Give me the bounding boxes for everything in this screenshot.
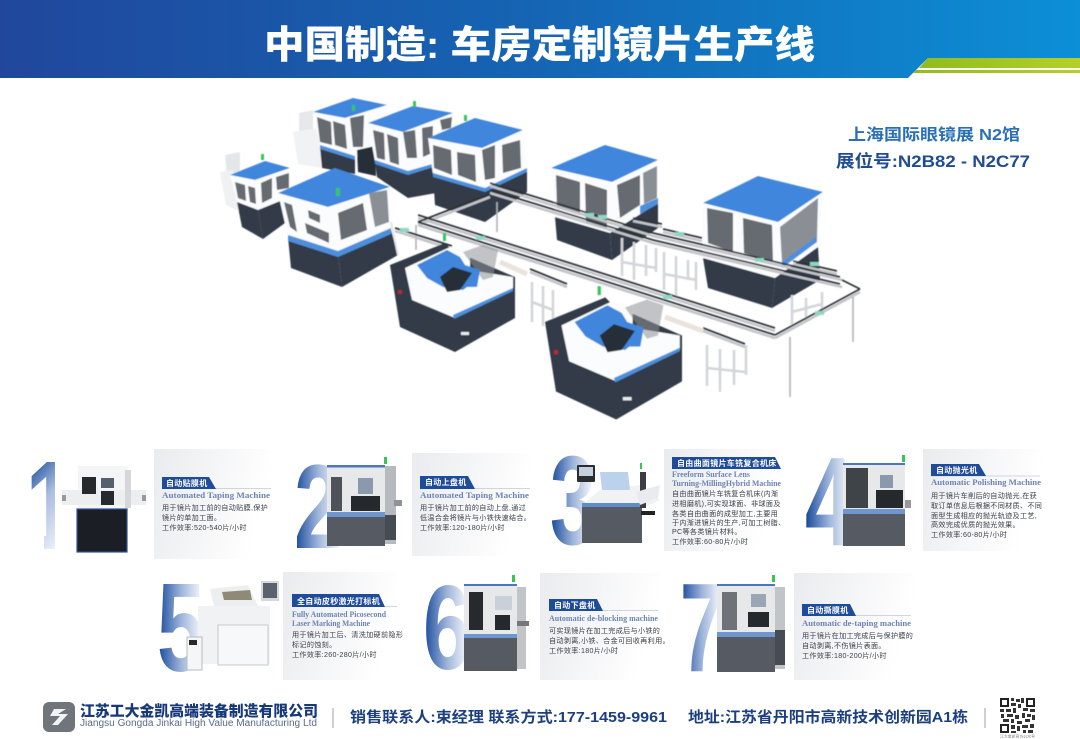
label 4 xyxy=(931,464,1042,539)
step 4 xyxy=(805,431,1042,572)
step 7 xyxy=(680,557,915,698)
panel 5 xyxy=(283,572,399,680)
machine 1 xyxy=(62,466,146,552)
label 5: Fully Automated Picosecond xyxy=(292,610,386,619)
machine: centre xyxy=(551,145,658,260)
label 3: PC等各类镜片材料。 xyxy=(672,527,742,536)
label 3: 工作效率:60-80片/小时 xyxy=(672,537,748,546)
panel 6 xyxy=(540,573,660,680)
numeral 6: 6 xyxy=(423,561,471,695)
label 7: 工作效率:180-200片/小时 xyxy=(802,651,887,660)
label 3: 于内渐进镜片的生产,可加工树脂、 xyxy=(672,518,786,527)
numeral 3: 3 xyxy=(550,430,596,571)
label 4: Automatic Polishing Machine xyxy=(931,478,1041,487)
company name: 江苏工大金凯高端装备制造有限公司 xyxy=(80,702,318,720)
sales contact: 销售联系人:束经理 联系方式:177-1459-9961 xyxy=(350,708,667,726)
label 2: Automated Taping Machine xyxy=(420,491,529,500)
label 1: 用于镜片加工前的自动贴膜,保护 xyxy=(162,503,268,512)
label 5: 标记的蚀刻。 xyxy=(292,640,336,649)
label 2 xyxy=(420,476,531,532)
company name: Jiangsu Gongda Jinkai High Value Manufacturing Ltd xyxy=(80,718,317,729)
label 3: 进相磨机),可实现球面、非球面及 xyxy=(672,499,781,508)
QR code xyxy=(1000,698,1035,733)
step 1 xyxy=(32,449,271,559)
exhibition hall: 上海国际眼镜展 N2馆 xyxy=(848,125,1020,144)
label 7 xyxy=(802,604,913,660)
panel 4 xyxy=(923,449,1041,551)
panel 7 xyxy=(794,573,915,680)
numeral 4: 4 xyxy=(805,431,853,572)
label 7: 用于镜片在加工完成后与保护膜的 xyxy=(802,631,913,640)
label 4: 高效完成优质的抛光效果。 xyxy=(931,520,1020,529)
CNC machine front xyxy=(545,286,682,419)
label 3 xyxy=(672,457,786,546)
label 6 xyxy=(549,599,670,655)
production line illustration xyxy=(220,98,860,419)
machine 6 xyxy=(464,575,529,671)
label 5: Laser Marking Machine xyxy=(292,619,370,628)
machine: front-left large xyxy=(278,168,398,287)
company logo xyxy=(43,702,75,732)
label 1: Automated Taping Machine xyxy=(162,491,270,500)
machine: far-left small xyxy=(220,152,290,239)
label 3: Freeform Surface Lens xyxy=(672,470,751,479)
machine 7 xyxy=(717,575,785,672)
label 5: 工作效率:260-280片/小时 xyxy=(292,650,377,659)
step 3 xyxy=(550,430,786,571)
header blue band xyxy=(0,0,1080,78)
label 4: 面型生成相应的抛光轨迹及工艺, xyxy=(931,511,1037,520)
address: 地址:江苏省丹阳市高新技术创新园A1栋 xyxy=(688,708,968,726)
label 4: 用于镜片车削后的自动抛光,在获 xyxy=(931,491,1037,500)
label 1: 工作效率:520-540片/小时 xyxy=(162,523,247,532)
label 6: 自动下盘机 xyxy=(554,600,596,610)
footer xyxy=(43,698,1036,738)
panel 1 xyxy=(154,449,272,559)
CNC machine left xyxy=(390,233,515,352)
panel 3 xyxy=(664,449,782,551)
label 6: 自动剥离,小铁、合金可回收再利用。 xyxy=(549,636,670,645)
label 1: 自动贴膜机 xyxy=(166,478,208,488)
label 2: 低温合金将镜片与小铁快速结合。 xyxy=(420,513,531,522)
label 6: 可实现镜片在加工完成后与小铁的 xyxy=(549,626,660,635)
label 7: 自动剥离,不伤镜片表面。 xyxy=(802,641,886,650)
machine 3 xyxy=(577,463,660,543)
machine 2 xyxy=(327,457,402,546)
conveyor rails xyxy=(395,183,860,347)
conveyor system xyxy=(395,183,860,397)
label 2: 用于镜片加工前的自动上盘,通过 xyxy=(420,503,526,512)
label 5: 用于镜片加工后、清洗加硬前隐形 xyxy=(292,630,403,639)
numeral 5: 5 xyxy=(157,557,205,698)
machine 4 xyxy=(843,455,911,546)
booth number: 展位号:N2B82 - N2C77 xyxy=(836,151,1030,171)
label 7: Automatic de-taping machine xyxy=(802,619,911,628)
label 6: 工作效率:180片/小时 xyxy=(549,646,618,655)
QR caption: 江大金凯官方公众号 xyxy=(1000,734,1036,738)
exhibition info xyxy=(836,125,1030,171)
title: 中国制造: 车房定制镜片生产线 xyxy=(264,25,815,67)
label 4: 取订单信息后根据不同材质、不同 xyxy=(931,501,1042,510)
label 7: 自动撕膜机 xyxy=(807,605,848,615)
panel 2 xyxy=(412,453,530,556)
step 2 xyxy=(294,440,531,574)
machine: back-middle xyxy=(368,101,453,198)
label 6: Automatic de-blocking machine xyxy=(549,614,658,623)
step 5 xyxy=(157,557,403,698)
label 5 xyxy=(292,594,403,659)
machine 5 xyxy=(187,581,279,670)
machine: back-left with trays xyxy=(293,98,390,176)
label 2: 自动上盘机 xyxy=(425,477,466,487)
label 2: 工作效率:120-180片/小时 xyxy=(420,523,505,532)
label 4: 自动抛光机 xyxy=(936,465,978,475)
lens trays on conveyor xyxy=(400,213,824,315)
numeral 1: 1 xyxy=(26,435,75,576)
label 4: 工作效率:60-80片/小时 xyxy=(931,530,1007,539)
label 1 xyxy=(162,477,271,532)
machine: right xyxy=(703,176,823,308)
label 3: 自由曲面镜片车铣复合机床 xyxy=(677,458,777,468)
label 3: 各类自由曲面的成型加工,主要用 xyxy=(672,509,778,518)
conveyor legs xyxy=(416,202,853,397)
label 5: 全自动皮秒激光打标机 xyxy=(297,596,380,606)
label 3: Turning-MillingHybrid Machine xyxy=(672,479,781,488)
machine: back-right xyxy=(428,115,527,222)
numeral 2: 2 xyxy=(294,440,342,574)
numeral 7: 7 xyxy=(680,557,724,698)
step 6 xyxy=(423,561,670,695)
header banner xyxy=(0,0,1080,78)
label 1: 镜片的单加工面。 xyxy=(162,513,221,522)
company name xyxy=(80,702,318,729)
green accent stripes xyxy=(913,58,1080,73)
label 3: 自由曲面镜片车铣复合机床(内渐 xyxy=(672,489,778,498)
